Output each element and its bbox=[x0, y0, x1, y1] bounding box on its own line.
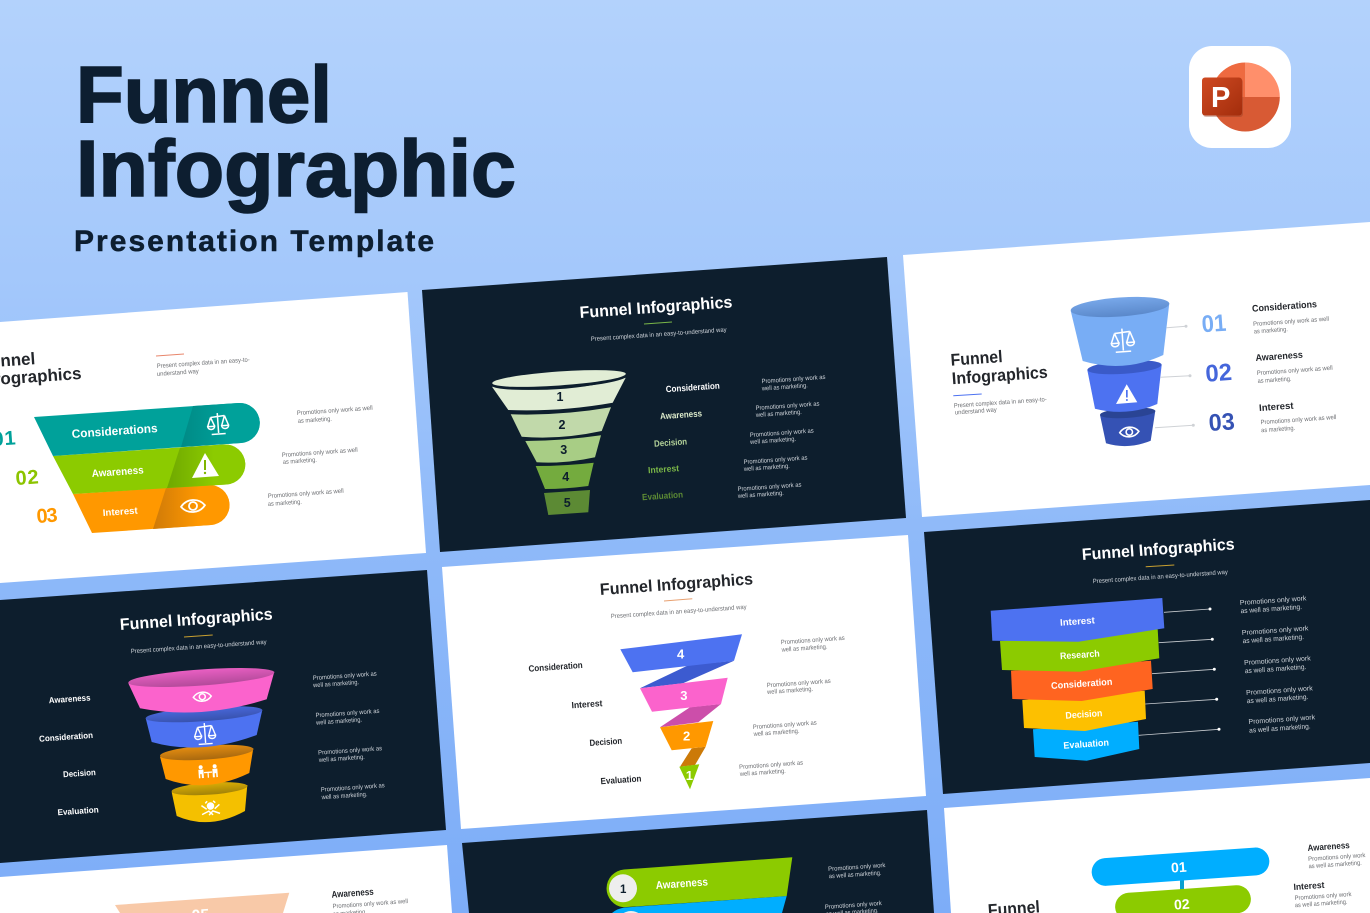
cup labels: Evaluation bbox=[57, 804, 99, 817]
descriptions: well as marketing. bbox=[749, 436, 797, 446]
panel: slide centre, ribbon funnel bbox=[442, 535, 926, 829]
label and description: awareness: Promotions only work bbox=[1308, 852, 1366, 863]
tier numbers: 1 bbox=[556, 390, 564, 404]
ribbon labels: Consideration bbox=[528, 660, 583, 674]
pill 01: 01 bbox=[1170, 859, 1187, 876]
cup labels bbox=[39, 692, 99, 817]
heading: Infographics bbox=[951, 363, 1048, 388]
panel: slide bottom-left, cropped peach funnel bbox=[0, 845, 452, 913]
descriptions: well as marketing. bbox=[737, 490, 784, 500]
ribbon labels: Decision bbox=[589, 736, 622, 748]
panel: slide top-left, three-band funnel bbox=[0, 292, 426, 583]
descriptions: Promotions only work bbox=[1242, 625, 1309, 637]
descriptions: as well as marketing. bbox=[1242, 634, 1304, 645]
pill 01 bbox=[1091, 847, 1270, 887]
descriptions: Promotions only work as bbox=[755, 401, 820, 412]
icon: person with hands bbox=[201, 800, 220, 816]
cup labels: Consideration bbox=[39, 730, 93, 744]
number badge 1: 1 bbox=[620, 884, 627, 896]
ribbon numbers: 2 bbox=[683, 728, 690, 744]
tier labels: Interest bbox=[648, 463, 679, 475]
label and description: awareness: Awareness bbox=[1307, 840, 1350, 853]
title bbox=[74, 50, 516, 258]
labels and descriptions: as marketing. bbox=[1254, 326, 1288, 335]
icon: PowerPoint logo bbox=[1189, 46, 1291, 148]
chevron labels: Consideration bbox=[1051, 677, 1113, 692]
descriptions: well as marketing. bbox=[761, 382, 808, 393]
icon: scales bbox=[1110, 328, 1135, 352]
descriptions: as well as marketing. bbox=[829, 870, 882, 880]
descriptions: Promotions only work as well bbox=[268, 488, 344, 500]
heading: Funnel bbox=[950, 347, 1003, 370]
descriptions: as well as marketing. bbox=[1240, 604, 1302, 615]
icon: warning triangle bbox=[192, 453, 219, 478]
number badge 1 bbox=[609, 874, 637, 902]
descriptions: as marketing. bbox=[298, 416, 332, 425]
band labels: Awareness bbox=[91, 464, 144, 480]
descriptions: Promotions only work as bbox=[761, 374, 826, 385]
subtitle: Present complex data in an easy-to- bbox=[954, 396, 1047, 410]
labels and descriptions: Considerations bbox=[1252, 299, 1317, 315]
chevron labels bbox=[1051, 615, 1113, 752]
descriptions: Promotions only work as bbox=[739, 760, 803, 771]
descriptions: Promotions only work bbox=[828, 862, 886, 873]
descriptions: well as marketing. bbox=[755, 409, 802, 419]
labels and descriptions bbox=[1252, 299, 1337, 434]
descriptions: well as marketing. bbox=[780, 643, 828, 654]
chevron labels: Evaluation bbox=[1063, 738, 1110, 752]
funnel band: considerations bbox=[34, 403, 260, 456]
tier numbers: 2 bbox=[558, 418, 566, 432]
label and description: awareness bbox=[1307, 840, 1366, 870]
label and description: interest: Interest bbox=[1293, 880, 1325, 892]
heading: Funnel Infographics bbox=[579, 293, 733, 322]
chevron labels: Decision bbox=[1065, 708, 1103, 722]
funnel band: awareness bbox=[53, 444, 245, 494]
number badge 2 bbox=[617, 911, 645, 913]
cup labels: Decision bbox=[63, 767, 96, 779]
icon: two people at table bbox=[198, 764, 218, 778]
cup labels: Awareness bbox=[48, 692, 91, 705]
pill 02: 02 bbox=[1173, 896, 1190, 913]
descriptions bbox=[312, 671, 385, 801]
funnel: four cups bbox=[128, 664, 275, 822]
ribbon numbers: 4 bbox=[677, 646, 685, 662]
descriptions: as marketing. bbox=[268, 499, 302, 508]
ribbon labels: Interest bbox=[571, 698, 603, 710]
funnel: zig-zag ribbon bbox=[620, 634, 742, 789]
heading: Funnel Infographics bbox=[599, 570, 754, 599]
label and description: interest: as well as marketing. bbox=[1295, 899, 1348, 909]
label and description: interest bbox=[1293, 880, 1352, 909]
band labels bbox=[71, 421, 158, 519]
descriptions: Promotions only work bbox=[1240, 595, 1307, 607]
peach funnel tier bbox=[115, 893, 289, 913]
labels and descriptions: Promotions only work as well bbox=[1253, 316, 1329, 328]
descriptions: Promotions only work bbox=[1244, 655, 1311, 667]
descriptions: well as marketing. bbox=[312, 679, 360, 689]
tier labels: Awareness bbox=[660, 408, 702, 421]
descriptions: well as marketing. bbox=[320, 791, 368, 801]
descriptions bbox=[825, 862, 886, 913]
descriptions bbox=[1240, 595, 1316, 735]
numbers: 03 bbox=[36, 505, 58, 528]
labels and descriptions: as marketing. bbox=[1261, 425, 1296, 434]
ribbon numbers: 1 bbox=[686, 768, 693, 783]
heading: Funnel Infographics bbox=[1081, 535, 1235, 564]
band label: Awareness bbox=[655, 876, 708, 892]
label and description bbox=[331, 887, 408, 913]
title: Presentation Template bbox=[74, 225, 434, 258]
title: Funnel bbox=[76, 50, 332, 139]
connector bbox=[1180, 878, 1184, 892]
tier labels: Decision bbox=[654, 436, 687, 449]
descriptions: Promotions only work as bbox=[753, 720, 817, 731]
labels and descriptions: Promotions only work as well bbox=[1257, 365, 1333, 377]
numbers: 02 bbox=[1205, 359, 1233, 388]
band labels: Considerations bbox=[71, 421, 158, 441]
labels and descriptions: Interest bbox=[1259, 401, 1295, 414]
tier labels bbox=[642, 381, 720, 502]
descriptions: as marketing. bbox=[283, 457, 317, 466]
panel: slide bottom-right, cropped pill stack bbox=[944, 778, 1370, 913]
labels and descriptions: Awareness bbox=[1255, 350, 1303, 364]
subtitle: Present complex data in an easy-to-understand way bbox=[1093, 569, 1229, 585]
descriptions: Promotions only work as bbox=[750, 428, 814, 439]
title: Infographic bbox=[76, 124, 516, 213]
descriptions: Promotions only work as bbox=[318, 745, 382, 757]
subtitle bbox=[954, 396, 1047, 416]
leader lines bbox=[1155, 325, 1194, 428]
labels and descriptions: as marketing. bbox=[1257, 376, 1292, 385]
subtitle: Present complex data in an easy-to-understand way bbox=[591, 326, 728, 343]
subtitle bbox=[157, 357, 250, 378]
label and description: awareness: as well as marketing. bbox=[1308, 860, 1362, 870]
numbers: 02 bbox=[15, 466, 39, 490]
band labels: Interest bbox=[102, 506, 139, 519]
label and description: interest: Promotions only work bbox=[1294, 891, 1352, 902]
descriptions: Promotions only work as bbox=[321, 782, 385, 794]
descriptions: well as marketing. bbox=[766, 686, 814, 696]
labels and descriptions: Promotions only work as well bbox=[1260, 414, 1337, 426]
tier numbers: 3 bbox=[560, 443, 567, 457]
ribbon numbers: 3 bbox=[680, 688, 688, 703]
descriptions: well as marketing. bbox=[739, 768, 786, 778]
descriptions: well as marketing. bbox=[743, 463, 790, 473]
descriptions: Promotions only work as bbox=[743, 455, 808, 466]
descriptions: Promotions only work as bbox=[315, 708, 380, 719]
numbers: 03 bbox=[1208, 408, 1236, 437]
funnel band: interest bbox=[73, 485, 230, 533]
ribbon labels: Evaluation bbox=[600, 773, 642, 786]
chevron labels: Research bbox=[1060, 649, 1100, 662]
icon: scales bbox=[207, 412, 229, 435]
band: awareness bbox=[607, 857, 792, 907]
descriptions: Promotions only work bbox=[825, 900, 883, 911]
panel: slide top-right, blue cup funnel bbox=[903, 222, 1370, 517]
numbers bbox=[0, 427, 58, 528]
band: blue bbox=[612, 896, 787, 913]
numbers: 01 bbox=[1201, 310, 1227, 338]
descriptions: Promotions only work as bbox=[767, 678, 831, 689]
panel: slide middle-left, colourful cup funnel bbox=[0, 570, 446, 863]
heading: Funnel Infographics bbox=[119, 605, 273, 634]
descriptions: Promotions only work bbox=[1248, 714, 1316, 726]
subtitle: Present complex data in an easy-to-understand way bbox=[131, 639, 268, 655]
numbers bbox=[1201, 310, 1236, 437]
icon: warning triangle bbox=[1116, 384, 1137, 404]
icon: PowerPoint logo: P bbox=[1211, 82, 1230, 114]
label and description: Promotions only work as well bbox=[332, 898, 408, 910]
panel: slide top-middle, green five-step funnel bbox=[422, 257, 906, 552]
descriptions bbox=[268, 405, 373, 508]
descriptions: well as marketing. bbox=[315, 716, 363, 727]
label and description: Awareness bbox=[331, 887, 374, 901]
funnel: green tiers bbox=[492, 367, 626, 515]
pill 02 bbox=[1114, 884, 1252, 913]
subtitle: Present complex data in an easy-to-understand way bbox=[611, 604, 748, 620]
icon: scales bbox=[194, 722, 216, 745]
descriptions: as well as marketing. bbox=[1247, 694, 1309, 705]
descriptions: as well as marketing. bbox=[1249, 723, 1311, 735]
descriptions: Promotions only work bbox=[1246, 685, 1313, 697]
leader lines bbox=[1139, 608, 1220, 735]
descriptions: Promotions only work as well bbox=[297, 405, 373, 417]
tier numbers: 5 bbox=[564, 496, 571, 510]
icon: eye bbox=[193, 692, 212, 702]
descriptions bbox=[737, 374, 826, 500]
descriptions: Promotions only work as bbox=[313, 671, 377, 682]
heading bbox=[0, 349, 82, 390]
chevron labels: Interest bbox=[1060, 615, 1096, 629]
funnel: blue cups bbox=[1070, 294, 1170, 446]
icon: eye bbox=[1119, 427, 1139, 437]
ribbon numbers bbox=[677, 646, 693, 783]
tier numbers bbox=[556, 390, 571, 510]
subtitle: understand way bbox=[157, 368, 200, 378]
descriptions: as well as marketing. bbox=[1245, 664, 1307, 675]
funnel: chevron layers bbox=[991, 598, 1164, 761]
icon: eye bbox=[181, 499, 205, 513]
subtitle: Present complex data in an easy-to- bbox=[157, 357, 250, 370]
descriptions: Promotions only work as bbox=[737, 482, 802, 493]
tier labels: Evaluation bbox=[642, 489, 683, 502]
tier numbers: 4 bbox=[562, 470, 569, 484]
subtitle: understand way bbox=[955, 407, 998, 416]
ribbon labels bbox=[528, 660, 642, 786]
descriptions: Promotions only work as bbox=[781, 635, 845, 646]
panel: slide bottom-middle, cropped pill funnel bbox=[462, 810, 934, 913]
heading bbox=[950, 347, 1048, 388]
descriptions bbox=[739, 635, 845, 778]
panel: slide middle-right, chevron funnel bbox=[924, 500, 1370, 794]
descriptions: Promotions only work as well bbox=[282, 447, 358, 459]
descriptions: well as marketing. bbox=[752, 728, 800, 738]
descriptions: well as marketing. bbox=[318, 754, 365, 764]
tier labels: Consideration bbox=[665, 381, 720, 394]
